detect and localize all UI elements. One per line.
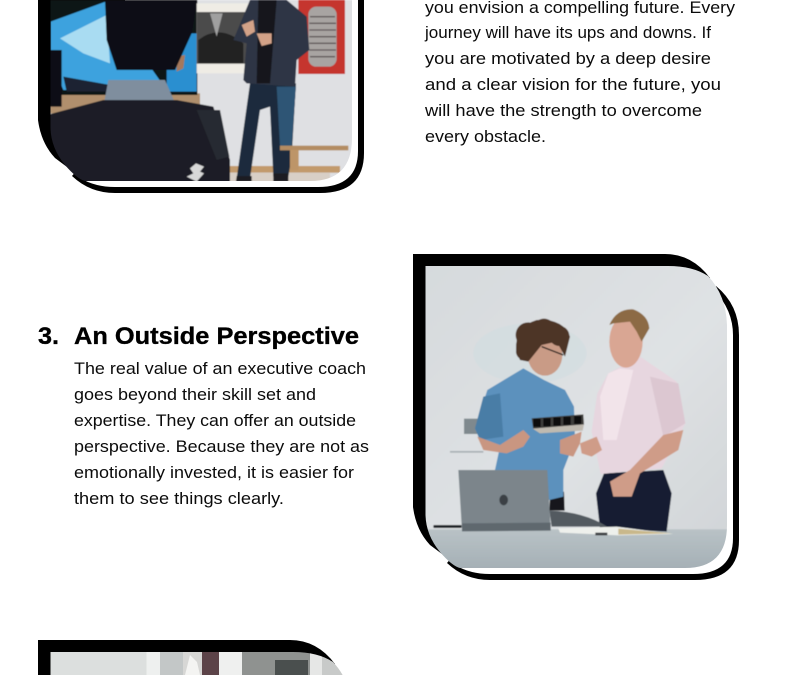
text: section 2 body: and a clear vision for the future, you — [425, 75, 721, 94]
text: section 3 body: emotionally invested, it is easier for — [74, 463, 354, 482]
text: section 2 body — [424, 0, 736, 146]
text: section 3 body: perspective. Because they are not as — [74, 437, 369, 456]
text: section 2 body: you are motivated by a deep desire — [425, 49, 711, 68]
seated viewer — [177, 55, 185, 72]
text: section 3 body: them to see things clearly. — [74, 489, 284, 508]
right man — [596, 470, 672, 532]
heading: 3. An Outside Perspective: An Outside Perspective — [74, 323, 359, 350]
text: section 3 body: goes beyond their skill set and — [74, 385, 316, 404]
text: section 2 body: will have the strength to overcome — [424, 101, 702, 120]
text: section 3 body: The real value of an executive coach — [74, 359, 366, 378]
standing man — [237, 83, 296, 178]
text: section 3 body: expertise. They can offer an outside — [74, 411, 356, 430]
heading: 3. An Outside Perspective: 3. — [38, 323, 59, 350]
bench — [280, 146, 348, 150]
chair back — [549, 511, 607, 527]
photo frame: next section (cropped) — [38, 640, 352, 675]
table — [428, 529, 727, 568]
photo frame: two men at whiteboard — [413, 254, 739, 580]
photo: interior, cropped at page edge — [50, 652, 352, 675]
device — [532, 414, 584, 429]
text: section 3 body — [74, 359, 369, 508]
notebook — [558, 527, 673, 535]
laptop — [458, 470, 551, 531]
photo: two men with device and laptop — [423, 263, 733, 573]
left man — [549, 492, 565, 511]
text: section 2 body: every obstacle. — [425, 127, 546, 146]
photo frame: presenter in front of audience — [38, 0, 380, 200]
photo: presenter scene — [50, 0, 352, 181]
text: section 2 body: journey will have its ups and downs. If — [424, 23, 711, 42]
